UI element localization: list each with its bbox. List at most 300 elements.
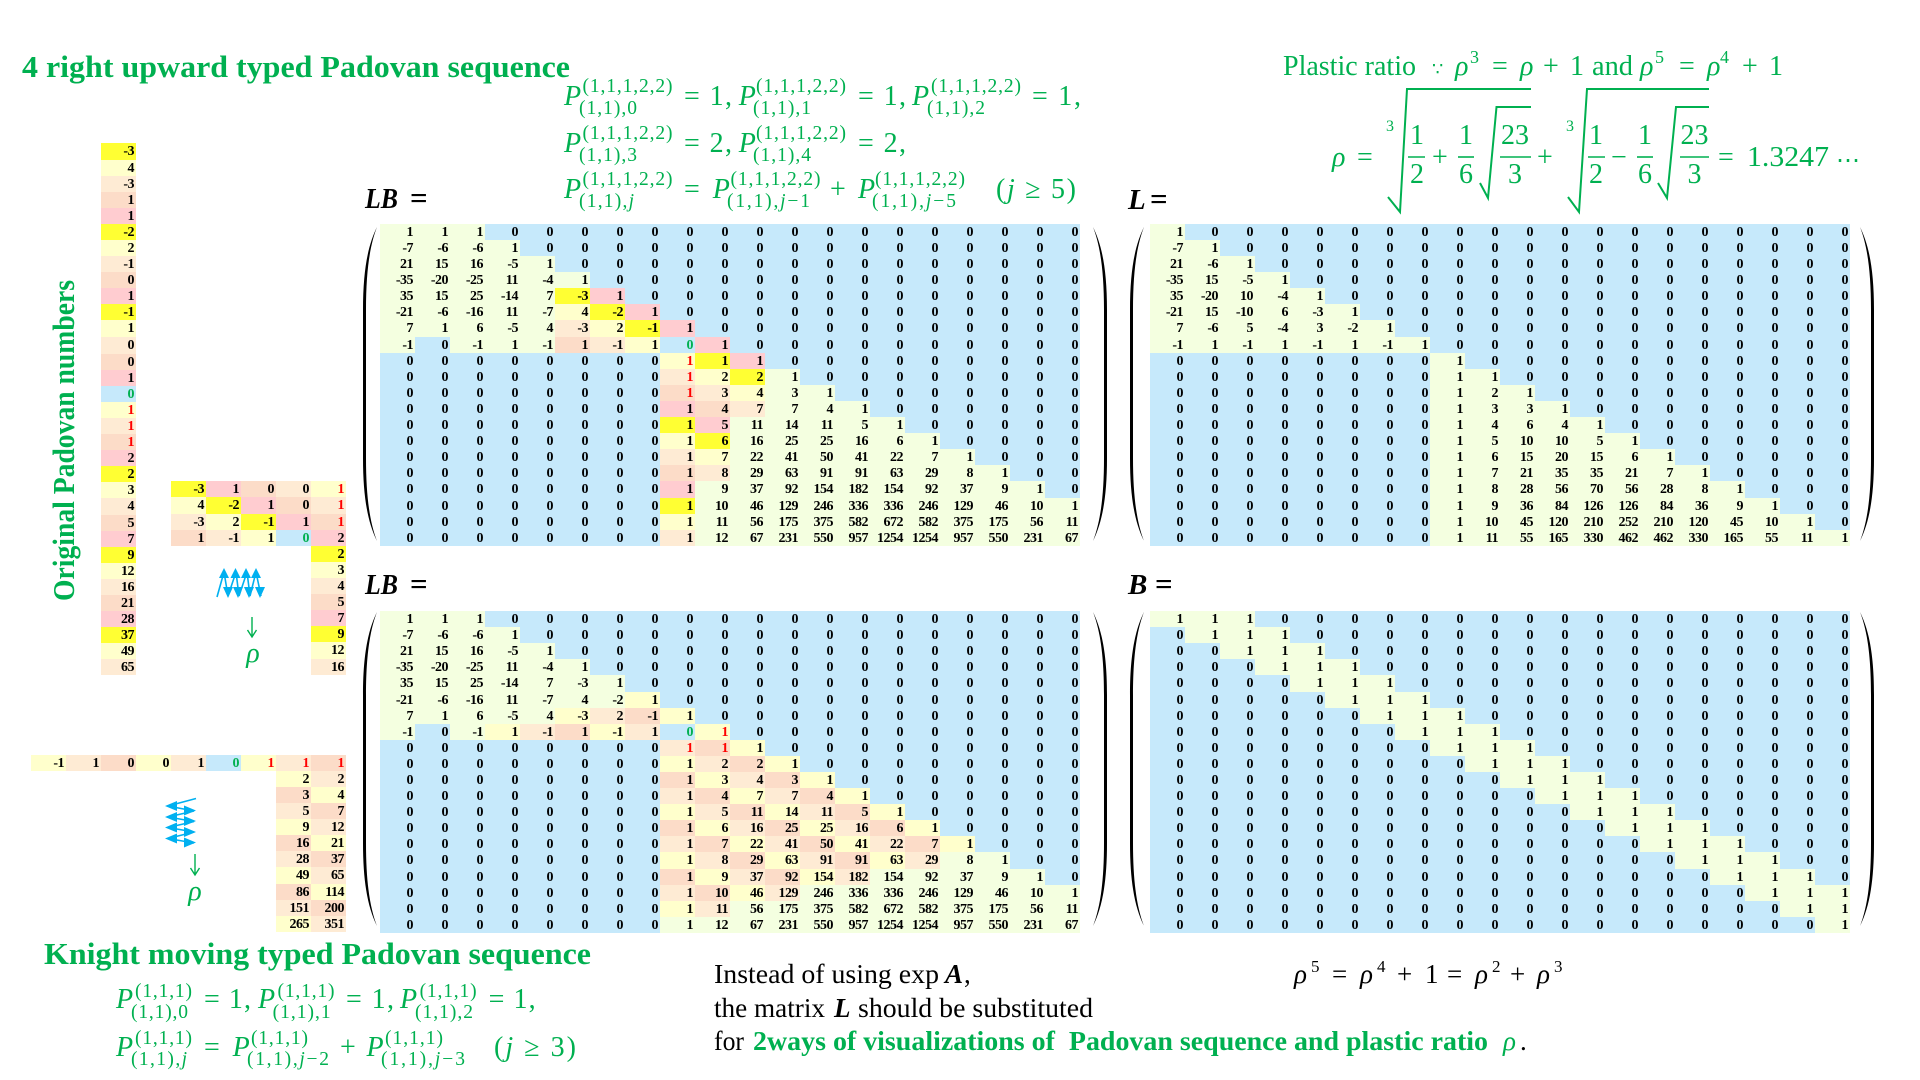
matrix: LB top highlighted: 14 [785,418,798,433]
matrix: LB bottom checkered: 0 [1002,709,1008,724]
matrix: LB top highlighted: 1 [686,450,693,465]
matrix: L: 0 [1456,321,1463,336]
matrix: B: 0 [1666,870,1673,885]
matrix: L: 0 [1456,273,1463,288]
text: explanation note: , [964,959,971,989]
matrix: LB top highlighted: 582 [918,515,938,530]
matrix: B: 0 [1492,821,1498,836]
table: knight moving two columns: 4 [338,788,344,803]
matrix: L: 0 [1456,225,1463,240]
formula: 4 right upward recurrence: (1,1),3 [579,145,637,166]
matrix: L: 15 [1590,450,1603,465]
matrix: LB top highlighted: 0 [826,370,833,385]
matrix: B: 0 [1456,612,1463,627]
matrix: LB top highlighted: 0 [966,402,973,417]
matrix: L: 0 [1736,225,1743,240]
table: knight moving two columns: 37 [331,852,344,867]
formula: 4 right upward recurrence: = 1, [684,81,732,112]
matrix: B: 1 [1422,725,1428,740]
matrix: LB top highlighted: 1254 [877,531,903,546]
matrix: L: 1 [1772,499,1778,514]
matrix: LB bottom checkered: 0 [652,821,658,836]
matrix: L: 0 [1422,418,1428,433]
matrix: B: 0 [1842,789,1848,804]
matrix: LB bottom checkered: 0 [546,886,553,901]
column: original Padovan numbers: 1 [128,371,134,386]
matrix: LB top highlighted: 22 [890,450,903,465]
matrix: LB bottom checkered: 0 [512,886,518,901]
matrix: LB bottom checkered: -6 [437,693,448,708]
matrix: L: 0 [1422,273,1428,288]
table: 4 right upward block: 0 [302,531,309,546]
matrix: L: 0 [1176,402,1183,417]
matrix: L: 0 [1736,434,1743,449]
matrix: LB top highlighted: 0 [722,273,728,288]
matrix: LB bottom checkered: 22 [890,837,903,852]
matrix: L: 0 [1386,370,1393,385]
matrix: LB bottom checkered: 11 [821,805,833,820]
matrix: L: 0 [1352,241,1358,256]
matrix: LB bottom checkered: -1 [472,725,483,740]
formula: 4 right upward recurrence: = 2, [684,128,732,159]
matrix: LB top highlighted: 0 [616,225,623,240]
matrix: B: 0 [1632,757,1638,772]
matrix: B: 0 [1176,693,1183,708]
matrix: LB top highlighted: 0 [756,257,763,272]
matrix: LB bottom checkered: -1 [542,725,553,740]
matrix: B: 1 [1772,886,1778,901]
matrix: LB bottom checkered: 0 [546,837,553,852]
matrix: LB top highlighted: 0 [582,466,588,481]
column: original Padovan numbers: -1 [123,257,134,272]
matrix: L: 0 [1352,515,1358,530]
matrix: L: 0 [1212,354,1218,369]
label: L equals [1127,181,1168,216]
matrix: LB bottom checkered: 957 [848,918,868,933]
formula: plastic ratio closed form: 1 [1410,120,1424,151]
matrix: LB bottom checkered: 3 [722,773,728,788]
matrix: LB bottom checkered: 0 [406,757,413,772]
matrix: LB top highlighted: 0 [1002,386,1008,401]
formula: knight moving recurrence: P [115,1032,133,1063]
matrix: L: 21 [1170,257,1183,272]
matrix: LB top highlighted: 0 [476,370,483,385]
matrix: LB bottom checkered: 2 [756,757,763,772]
matrix: L: 3 [1492,402,1498,417]
matrix: LB bottom checkered: 4 [722,789,728,804]
table: knight moving two columns: 2 [302,772,309,787]
matrix: B: 0 [1842,741,1848,756]
matrix: L: 0 [1282,354,1288,369]
matrix: LB bottom checkered: 37 [750,870,763,885]
matrix: LB bottom checkered: 10 [715,886,728,901]
matrix: LB top highlighted: 375 [954,515,973,530]
matrix: LB top highlighted: 550 [814,531,833,546]
matrix: B: 1 [1492,757,1498,772]
table: knight moving two columns: 2 [338,772,344,787]
matrix: L: 10 [1485,515,1498,530]
matrix: LB top highlighted: 4 [582,305,588,320]
matrix: LB top highlighted: 0 [686,273,693,288]
matrix: LB top highlighted: 0 [862,273,868,288]
matrix: LB top highlighted: 0 [546,499,553,514]
matrix: LB bottom checkered: 0 [1002,693,1008,708]
matrix: LB top highlighted: 0 [616,499,623,514]
matrix: B: 1 [1596,805,1603,820]
matrix: LB bottom checkered: 0 [582,644,588,659]
matrix: B: 0 [1736,821,1743,836]
matrix: B: 0 [1736,741,1743,756]
matrix: B: 0 [1632,837,1638,852]
matrix: L: 0 [1842,273,1848,288]
matrix: B: 0 [1176,789,1183,804]
matrix: LB bottom checkered: 0 [966,644,973,659]
matrix: L: 1 [1456,418,1463,433]
matrix: L: 0 [1352,289,1358,304]
matrix: L: 1 [1282,338,1288,353]
matrix: LB bottom checkered: 582 [918,902,938,917]
matrix: LB top highlighted: 672 [884,515,903,530]
matrix: LB top highlighted: -1 [612,338,623,353]
matrix: LB top highlighted: 0 [1072,321,1078,336]
matrix: LB top highlighted: 0 [756,289,763,304]
matrix: L [1150,224,1850,546]
matrix: LB bottom checkered: 0 [546,853,553,868]
matrix: L: 0 [1282,370,1288,385]
matrix: LB bottom checkered: -3 [577,709,588,724]
column: original Padovan numbers: 49 [121,644,134,659]
matrix: LB bottom checkered: 0 [1036,676,1043,691]
matrix: L: 0 [1526,354,1533,369]
matrix: B: 0 [1212,789,1218,804]
matrix: LB top highlighted: 1 [722,338,728,353]
matrix: L: 0 [1422,515,1428,530]
matrix: LB bottom checkered: 0 [826,741,833,756]
formula: knight moving recurrence: P [257,984,275,1015]
matrix: LB bottom checkered: 0 [442,757,448,772]
matrix: L: 0 [1352,386,1358,401]
matrix: B: 0 [1702,676,1708,691]
matrix: B: 0 [1666,741,1673,756]
matrix: LB bottom checkered: 0 [722,644,728,659]
matrix: L: 0 [1772,418,1778,433]
matrix: B: 0 [1596,902,1603,917]
matrix: LB top highlighted: 0 [616,273,623,288]
matrix: LB top highlighted: 0 [652,466,658,481]
matrix: B: 0 [1282,709,1288,724]
matrix: LB bottom checkered: 0 [546,628,553,643]
matrix: B: 0 [1422,660,1428,675]
matrix: LB top highlighted: 175 [778,515,798,530]
matrix: L: 0 [1702,289,1708,304]
column: original Padovan numbers: 0 [128,387,134,402]
matrix: LB bottom checkered: 0 [512,789,518,804]
matrix: LB bottom checkered: 0 [792,709,798,724]
matrix: LB top highlighted: 0 [896,354,903,369]
matrix: B: 0 [1562,660,1568,675]
matrix: L: 0 [1562,257,1568,272]
matrix: LB top highlighted: 1 [616,289,623,304]
formula: 4 right upward recurrence: (1,1,1,2,2) [582,76,672,97]
formula: plastic ratio closed form: = [1718,142,1734,173]
matrix: B: 0 [1176,918,1183,933]
matrix: LB top highlighted: 4 [756,386,763,401]
matrix: B: 0 [1666,918,1673,933]
matrix: LB bottom checkered: 0 [442,886,448,901]
matrix: LB top highlighted: 0 [932,273,938,288]
matrix: LB top highlighted: 41 [785,450,798,465]
matrix: LB top highlighted: 0 [932,225,938,240]
matrix: LB top highlighted: 1 [686,531,693,546]
matrix: LB top highlighted: 0 [442,338,448,353]
matrix: LB bottom checkered: 0 [1072,628,1078,643]
brackets: LB bottom right [1093,612,1107,926]
matrix: LB top highlighted: 231 [778,531,798,546]
matrix: L: 0 [1666,402,1673,417]
formula: knight moving recurrence [115,981,576,1070]
matrix: B: 0 [1212,902,1218,917]
formula: rho power identity: + [1397,959,1412,989]
matrix: LB top highlighted: 0 [966,289,973,304]
matrix: LB bottom checkered: 0 [546,773,553,788]
matrix: L: 0 [1806,321,1813,336]
matrix: L: -1 [1382,338,1393,353]
column: original Padovan numbers: 2 [128,451,134,466]
matrix: B: 0 [1352,773,1358,788]
text: explanation note: 2ways of visualizations of Padovan sequence and plastic ratio [753,1026,1488,1056]
formula: plastic ratio closed form: 1 [1638,120,1652,151]
matrix: LB top highlighted: 0 [582,434,588,449]
matrix: LB top highlighted: 1 [756,354,763,369]
matrix: LB top highlighted: 0 [582,418,588,433]
matrix: L: 1 [1456,450,1463,465]
table: 4 right upward block: 1 [338,515,344,530]
matrix: LB top highlighted: 0 [1036,370,1043,385]
matrix: B: 0 [1842,693,1848,708]
matrix: LB top highlighted: 0 [442,499,448,514]
table: knight moving two columns: 200 [324,901,344,916]
matrix: LB bottom checkered: -20 [431,660,448,675]
matrix: L: 0 [1212,370,1218,385]
matrix: LB top highlighted: 0 [476,515,483,530]
matrix: L: 0 [1352,257,1358,272]
matrix: L: 0 [1386,515,1393,530]
matrix: LB bottom checkered: 0 [512,741,518,756]
matrix: LB top highlighted: 1 [686,482,693,497]
matrix: LB bottom checkered: 0 [1002,741,1008,756]
matrix: LB top highlighted: 0 [896,338,903,353]
matrix: LB bottom checkered: 0 [442,837,448,852]
matrix: LB bottom checkered: 0 [932,741,938,756]
matrix: B: 0 [1456,886,1463,901]
matrix: LB top highlighted: 0 [512,531,518,546]
formula: rho power identity: 2 [1492,957,1500,976]
table: knight moving two columns: 7 [338,804,344,819]
matrix: LB bottom checkered: 0 [512,837,518,852]
matrix: L: 0 [1632,418,1638,433]
matrix: L: 0 [1842,515,1848,530]
column: original Padovan numbers: 1 [128,403,134,418]
matrix: LB top highlighted: 0 [1036,434,1043,449]
matrix: B: 0 [1386,853,1393,868]
matrix: B: 0 [1282,805,1288,820]
matrix: L: 0 [1736,450,1743,465]
matrix: LB top highlighted: 0 [966,370,973,385]
text: explanation note [714,959,1527,1056]
matrix: LB bottom checkered: 0 [932,676,938,691]
matrix: L: 0 [1316,450,1323,465]
matrix: LB bottom checkered: 25 [470,676,483,691]
matrix: L: 165 [1548,531,1568,546]
matrix: L: 0 [1736,402,1743,417]
matrix: L: -35 [1166,273,1183,288]
matrix: LB top highlighted: 0 [616,515,623,530]
matrix: L: 0 [1702,321,1708,336]
matrix: LB top highlighted: 0 [652,225,658,240]
matrix: LB bottom checkered: 0 [792,660,798,675]
matrix: LB bottom checkered: 11 [1066,902,1078,917]
matrix: LB bottom checkered: 0 [896,789,903,804]
matrix: L: 0 [1842,257,1848,272]
matrix: L: 1 [1806,515,1813,530]
matrix: L: 0 [1456,338,1463,353]
matrix: LB top highlighted: 7 [722,450,728,465]
matrix: LB top highlighted: 182 [848,482,868,497]
matrix: LB bottom checkered: 0 [1072,612,1078,627]
matrix: B: 1 [1562,773,1568,788]
matrix: LB bottom checkered: 0 [1002,628,1008,643]
matrix: LB top highlighted: 0 [862,225,868,240]
matrix: L: 0 [1842,354,1848,369]
matrix: LB bottom checkered: 25 [785,821,798,836]
matrix: LB top highlighted: 92 [925,482,938,497]
matrix: LB bottom checkered: 0 [896,709,903,724]
formula: 4 right upward recurrence: P [712,174,730,205]
formula: knight moving recurrence: (1,1),1 [273,1002,331,1023]
formula: plastic ratio definition: = [1679,51,1695,82]
matrix: LB bottom checkered: 0 [896,660,903,675]
matrix: LB bottom checkered: 0 [896,725,903,740]
matrix: L: 1 [1492,370,1498,385]
matrix: B: 0 [1736,628,1743,643]
matrix: LB bottom checkered: 1 [686,789,693,804]
matrix: B: 0 [1386,870,1393,885]
matrix: LB bottom checkered: 0 [862,676,868,691]
vertical heading: Original Padovan numbers: Original Padovan numbers [46,280,81,601]
matrix: L: 0 [1176,466,1183,481]
matrix: LB top highlighted: 91 [855,466,868,481]
matrix: LB bottom checkered: 1 [512,725,518,740]
matrix: B: 1 [1456,709,1463,724]
matrix: L: 0 [1422,257,1428,272]
matrix: L: 0 [1246,466,1253,481]
matrix: B: 0 [1422,821,1428,836]
matrix: LB bottom checkered: 0 [476,789,483,804]
matrix: L: 1 [1842,531,1848,546]
table: 4 right upward block: 1 [268,531,274,546]
matrix: L: 36 [1695,499,1708,514]
matrix: B: 0 [1736,676,1743,691]
matrix: LB top highlighted: 0 [406,370,413,385]
matrix: L: 10 [1765,515,1778,530]
matrix: B: 0 [1282,773,1288,788]
matrix: LB top highlighted: 0 [512,434,518,449]
formula: 4 right upward recurrence: P [738,81,756,112]
formula: knight moving recurrence: (1,1),j [131,1049,187,1070]
matrix: LB bottom checkered: 1 [686,805,693,820]
matrix: LB top highlighted: 1 [1002,466,1008,481]
matrix: L: 0 [1352,531,1358,546]
matrix: LB bottom checkered: 0 [616,853,623,868]
matrix: L: 0 [1176,515,1183,530]
matrix: B: 0 [1456,773,1463,788]
matrix: LB bottom checkered: 0 [686,693,693,708]
matrix: LB top highlighted: 0 [652,257,658,272]
matrix: B: 0 [1736,918,1743,933]
matrix: B: 0 [1702,789,1708,804]
matrix: B: 1 [1316,660,1323,675]
matrix: LB bottom checkered: 0 [476,805,483,820]
matrix: B: 0 [1666,660,1673,675]
matrix: LB top highlighted: 0 [442,386,448,401]
matrix: LB top highlighted: 0 [512,482,518,497]
matrix: LB top highlighted: 91 [820,466,833,481]
matrix: L: 7 [1492,466,1498,481]
matrix: LB top highlighted: 1 [546,257,553,272]
matrix: B: 0 [1212,676,1218,691]
formula: 4 right upward recurrence: = 1, [858,81,906,112]
matrix: B: 0 [1492,773,1498,788]
matrix: L: 0 [1702,418,1708,433]
matrix: LB top highlighted: 0 [582,225,588,240]
matrix: B: 0 [1736,757,1743,772]
matrix: LB bottom checkered: 0 [476,886,483,901]
column: 4 right upward continuation: 16 [331,660,344,675]
matrix: B: 1 [1246,628,1253,643]
matrix: B: 0 [1282,853,1288,868]
matrix: LB top highlighted: 0 [966,241,973,256]
matrix: B: 0 [1772,709,1778,724]
matrix: LB bottom checkered: 0 [1002,821,1008,836]
matrix: B: 0 [1562,918,1568,933]
matrix: LB top highlighted: 0 [896,305,903,320]
matrix: B: 0 [1212,837,1218,852]
matrix: B: 0 [1316,757,1323,772]
matrix: B: 0 [1212,886,1218,901]
column: original Padovan numbers: -3 [123,144,134,159]
formula: knight moving recurrence: (1,1),0 [131,1002,188,1023]
matrix: B: 0 [1282,837,1288,852]
matrix: LB top highlighted: 0 [546,354,553,369]
brackets: B left [1130,612,1144,926]
matrix: LB bottom checkered: 15 [435,676,448,691]
matrix: LB bottom checkered: 16 [750,821,763,836]
matrix: LB top highlighted: 0 [932,386,938,401]
matrix: B: 0 [1596,886,1603,901]
matrix: B: 0 [1596,853,1603,868]
matrix: B: 0 [1562,870,1568,885]
matrix: L: 0 [1596,338,1603,353]
formula: knight moving recurrence: = [204,1032,220,1063]
matrix: L: 0 [1492,257,1498,272]
matrix: B: 0 [1386,918,1393,933]
matrix: LB bottom checkered: 0 [582,773,588,788]
matrix: LB top highlighted: 0 [932,402,938,417]
matrix: LB bottom checkered: 0 [932,660,938,675]
matrix: LB top highlighted: 154 [884,482,903,497]
matrix: L: 0 [1316,241,1323,256]
table: 4 right upward block: 2 [232,515,239,530]
